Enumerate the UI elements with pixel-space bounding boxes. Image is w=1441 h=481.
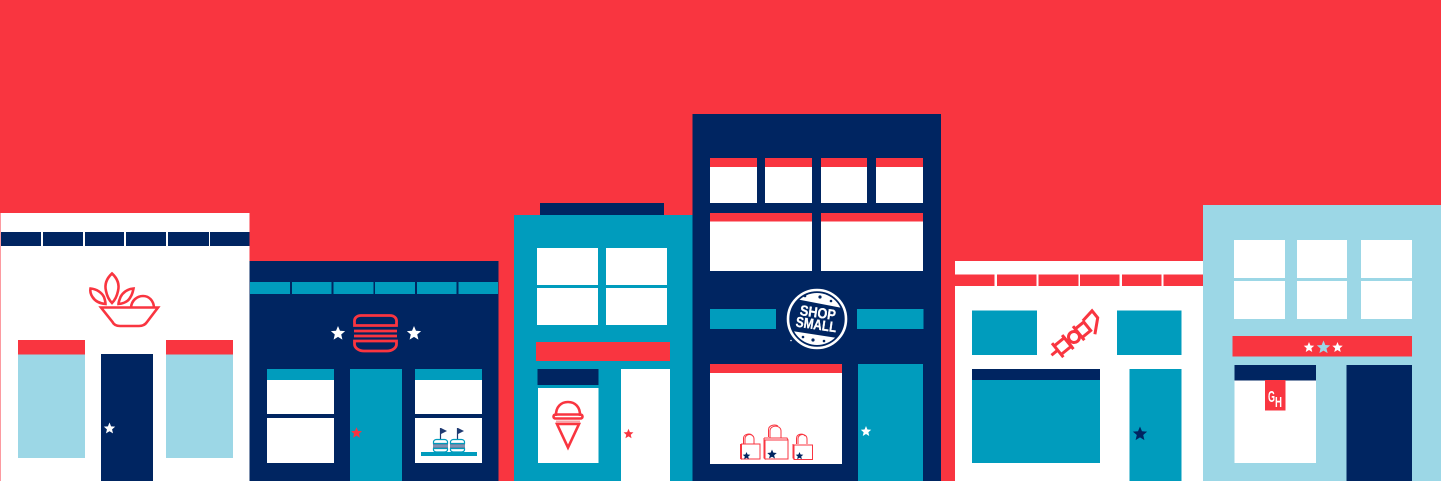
navy frieze band xyxy=(1,232,250,246)
door with star xyxy=(350,369,402,481)
door with star xyxy=(621,369,670,481)
top row windows xyxy=(710,158,923,203)
upper left window xyxy=(972,310,1037,355)
lower window xyxy=(972,369,1100,463)
right windows xyxy=(415,369,482,463)
icon: GH tag xyxy=(1265,380,1286,411)
left window xyxy=(18,340,85,458)
icon: candy xyxy=(1046,311,1105,364)
shop window with bags xyxy=(710,364,842,464)
red sign xyxy=(536,342,670,361)
icon: burgers on shelf with flags xyxy=(421,428,477,456)
teal frieze band xyxy=(250,282,498,294)
upper right window xyxy=(1117,310,1182,355)
building 6: grubhub shop xyxy=(1203,205,1441,481)
left windows xyxy=(267,369,334,463)
shop window with tag xyxy=(1234,365,1316,463)
building 1: salad shop xyxy=(0,213,250,481)
second row windows xyxy=(710,213,923,271)
badge: shop small: SMALL xyxy=(795,315,838,336)
teal sign right xyxy=(857,309,924,329)
star left xyxy=(331,326,345,340)
building 5: candy shop xyxy=(955,261,1204,481)
door xyxy=(1346,365,1412,481)
red sign with stars xyxy=(1232,336,1412,356)
star right xyxy=(407,326,421,340)
icon: salad bowl xyxy=(90,274,158,326)
red frieze band xyxy=(955,274,1203,286)
icon: shopping bags xyxy=(740,425,812,460)
building 3: ice cream shop xyxy=(514,203,692,481)
upper windows xyxy=(1234,240,1412,319)
door with star xyxy=(101,354,153,481)
building 2: burger shop xyxy=(250,261,498,481)
building 4: shop small tower xyxy=(692,114,941,481)
upper windows xyxy=(537,248,667,325)
right window xyxy=(166,340,233,458)
shop window xyxy=(538,369,598,463)
roof block xyxy=(540,203,664,216)
icon: ice cream cone xyxy=(554,402,582,448)
badge: shop small xyxy=(786,288,848,350)
teal sign left xyxy=(710,309,776,329)
illustration: row of storefronts xyxy=(0,114,1441,481)
icon: GH tag: H xyxy=(1275,394,1282,411)
door with star xyxy=(858,364,923,481)
icon: GH tag: G xyxy=(1268,389,1275,406)
icon: burger xyxy=(354,316,397,351)
badge: shop small: SHOP xyxy=(799,303,837,324)
door with star xyxy=(1130,369,1182,481)
